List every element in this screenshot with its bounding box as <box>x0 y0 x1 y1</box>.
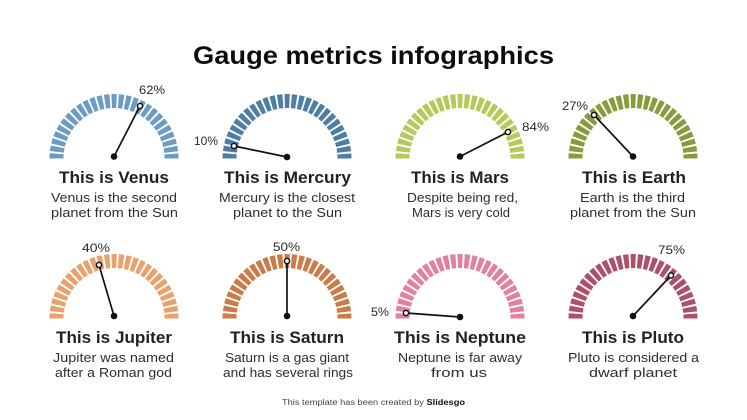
description: Earth <box>570 191 696 220</box>
gauge: Neptune 5% <box>371 261 518 320</box>
panel: Earth <box>562 99 696 220</box>
description: Pluto: Pluto is considered a <box>568 351 699 365</box>
panel: Jupiter <box>53 241 174 380</box>
gauge: Mars 84% <box>402 101 549 160</box>
title: Gauge metrics infographics <box>193 42 554 70</box>
heading: Venus: This is Venus <box>59 168 169 187</box>
heading: Mars: This is Mars <box>411 168 509 187</box>
panel: Mars <box>402 101 549 220</box>
description: Venus: planet from the Sun <box>51 206 178 220</box>
description: Saturn: and has several rings <box>223 366 353 380</box>
description: Saturn <box>223 351 353 380</box>
description: Pluto: dwarf planet <box>589 366 678 380</box>
gauge: Jupiter 40%: 40% <box>82 241 110 255</box>
gauge: Earth 27%: 27% <box>562 99 588 113</box>
panel: Pluto <box>568 243 699 380</box>
description: Neptune: Neptune is far away <box>398 351 523 365</box>
description: Jupiter: after a Roman god <box>55 366 172 380</box>
description: Jupiter <box>53 351 174 380</box>
description: Venus: Venus is the second <box>51 191 177 205</box>
heading: Mercury: This is Mercury <box>224 168 352 187</box>
gauge: Neptune 5%: 5% <box>371 305 389 319</box>
description: Mars <box>407 191 518 220</box>
description: Venus <box>51 191 178 220</box>
description: Mars: Despite being red, <box>407 191 518 205</box>
panel: Mercury <box>194 101 356 220</box>
description: Mercury <box>219 191 356 220</box>
description: Mercury: Mercury is the closest <box>219 191 356 205</box>
gauge: Pluto 75%: 75% <box>658 243 685 257</box>
heading: Jupiter: This is Jupiter <box>56 328 172 347</box>
description: Mercury: planet to the Sun <box>233 206 342 220</box>
gauge: Mercury 10%: 10% <box>194 134 218 148</box>
heading: Neptune: This is Neptune <box>394 328 526 347</box>
gauge: Mercury 10% <box>194 101 344 160</box>
panel: Venus <box>51 83 178 220</box>
gauge: Venus 62%: 62% <box>139 83 165 97</box>
description: Neptune <box>398 351 523 380</box>
heading: Pluto: This is Pluto <box>582 328 684 347</box>
footer credit: This template has been created by Slidesgo <box>282 398 465 407</box>
heading: Saturn: This is Saturn <box>230 328 344 347</box>
panel: Saturn <box>223 240 353 380</box>
description: Jupiter: Jupiter was named <box>53 351 174 365</box>
description: Earth: planet from the Sun <box>570 206 696 220</box>
gauge: Saturn 50%: 50% <box>273 240 300 254</box>
gauge: Mars 84%: 84% <box>522 120 549 134</box>
description: Earth: Earth is the third <box>580 191 685 205</box>
description: Mars: Mars is very cold <box>412 206 510 220</box>
description: Neptune: from us <box>431 366 487 380</box>
panel: Neptune <box>371 261 526 380</box>
description: Pluto <box>568 351 699 380</box>
heading: Earth: This is Earth <box>582 168 686 187</box>
description: Saturn: Saturn is a gas giant <box>225 351 350 365</box>
